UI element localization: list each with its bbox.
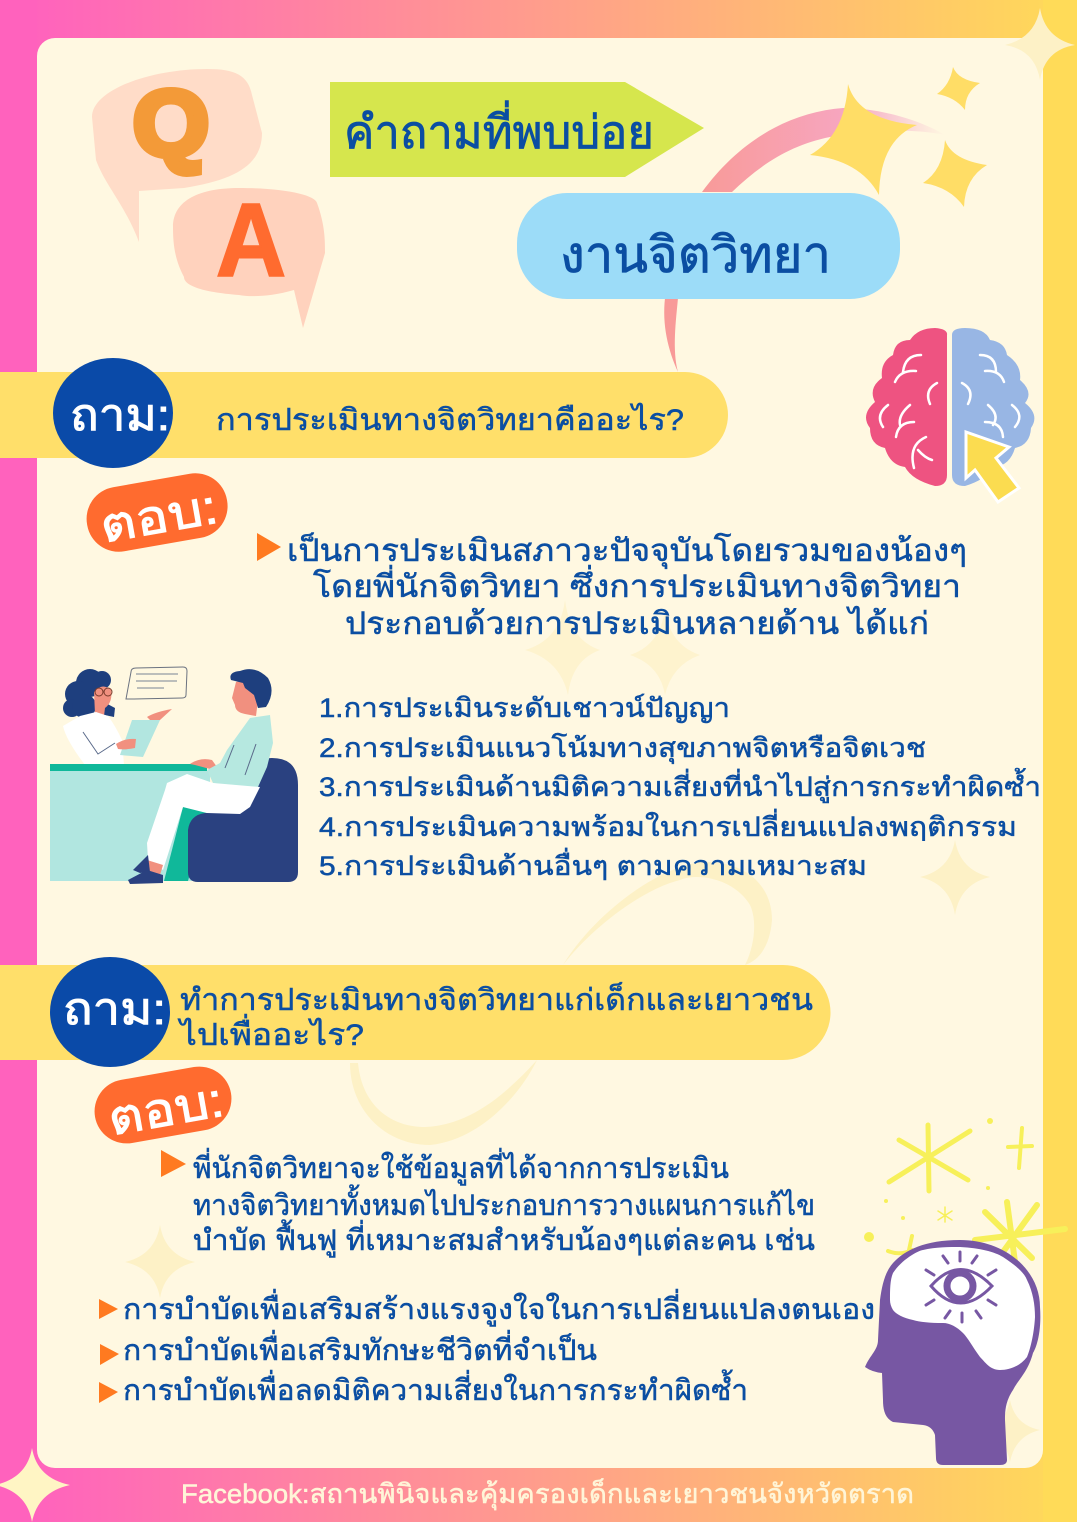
arrow bullet xyxy=(161,1150,186,1177)
question bar 1: ถาม: xyxy=(70,391,170,440)
answer badge 2 xyxy=(89,1062,237,1148)
answer badge 1: ตอบ: xyxy=(96,481,222,554)
A speech bubble: A xyxy=(216,183,286,299)
answer text 1: โดยพี่นักจิตวิทยา ซึ่งการประเมินทางจิตวิทยา xyxy=(313,565,961,604)
corner sparkle bottom left xyxy=(0,1448,70,1522)
icon: head with eye xyxy=(865,1240,1040,1465)
arrow bullet xyxy=(257,533,281,561)
pink arc behind title xyxy=(664,108,945,372)
question bar 2: ไปเพื่ออะไร? xyxy=(178,1014,364,1052)
title banner: คำถามที่พบบ่อย: คำถามที่พบบ่อย xyxy=(344,100,654,158)
illustration: psychologist and client xyxy=(50,667,298,884)
answer badge 1 xyxy=(82,468,233,557)
question bar 2: ถาม: xyxy=(63,985,166,1034)
numbered list: 4.การประเมินความพร้อมในการเปลี่ยนแปลงพฤติกรรม xyxy=(319,809,1017,842)
A speech bubble xyxy=(173,183,325,328)
question bar 2: ทำการประเมินทางจิตวิทยาแก่เด็กและเยาวชน xyxy=(180,981,813,1017)
Q speech bubble: Q xyxy=(133,71,209,175)
numbered list: 1.การประเมินระดับเชาวน์ปัญญา xyxy=(319,693,730,723)
subtitle pill: งานจิตวิทยา: งานจิตวิทยา xyxy=(560,227,831,283)
answer text 1: เป็นการประเมินสภาวะปัจจุบันโดยรวมของน้องๆ xyxy=(287,532,967,570)
numbered list xyxy=(319,693,1041,881)
numbered list: 2.การประเมินแนวโน้มทางสุขภาพจิตหรือจิตเวช xyxy=(319,733,926,764)
bullet list: การบำบัดเพื่อเสริมสร้างแรงจูงใจในการเปลี่ยนแปลงตนเอง xyxy=(123,1289,875,1327)
bullet list: การบำบัดเพื่อเสริมทักษะชีวิตที่จำเป็น xyxy=(123,1330,597,1367)
icon: brain with cursor xyxy=(866,328,1034,502)
title banner: คำถามที่พบบ่อย xyxy=(330,82,704,177)
numbered list: 3.การประเมินด้านมิติความเสี่ยงที่นำไปสู่การกระทำผิดซ้ำ xyxy=(319,768,1041,803)
answer text 2: พี่นักจิตวิทยาจะใช้ข้อมูลที่ได้จากการประเมิน xyxy=(193,1148,729,1186)
question bar 1 xyxy=(0,358,728,468)
question bar 2 xyxy=(0,957,830,1067)
footer: Facebook page: Facebook:สถานพินิจและคุ้มครองเด็กและเยาวชนจังหวัดตราด xyxy=(181,1476,914,1511)
yellow sparkle stars xyxy=(810,67,987,207)
subtitle pill: งานจิตวิทยา xyxy=(517,193,900,299)
bullet list: การบำบัดเพื่อลดมิติความเสี่ยงในการกระทำผิดซ้ำ xyxy=(123,1369,748,1407)
Q speech bubble xyxy=(92,69,262,242)
yellow firework sparks xyxy=(888,1125,1065,1270)
answer text 2 xyxy=(193,1148,815,1258)
answer badge 2: ตอบ: xyxy=(104,1074,228,1146)
numbered list: 5.การประเมินด้านอื่นๆ ตามความเหมาะสม xyxy=(319,848,867,881)
bullet list xyxy=(99,1289,875,1407)
answer text 2: ทางจิตวิทยาทั้งหมดไปประกอบการวางแผนการแก้ไข xyxy=(193,1184,815,1222)
answer text 2: บำบัด ฟื้นฟู ที่เหมาะสมสำหรับน้องๆแต่ละคน เช่น xyxy=(193,1219,815,1258)
answer text 1: ประกอบด้วยการประเมินหลายด้าน ได้แก่ xyxy=(345,606,929,641)
question bar 1: การประเมินทางจิตวิทยาคืออะไร? xyxy=(216,402,684,437)
answer text 1 xyxy=(287,532,967,641)
